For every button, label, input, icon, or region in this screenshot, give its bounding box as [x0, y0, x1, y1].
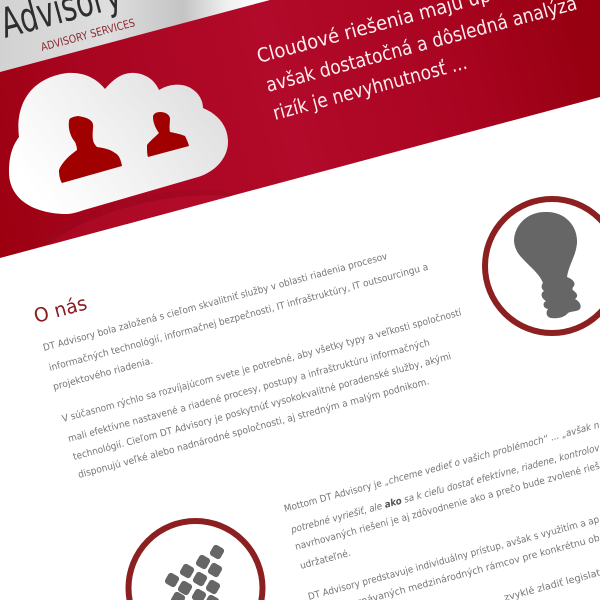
text block: about 2: V súčasnom rýchlo sa rozvíjajúcom svete je potrebné, aby všetky typy a veľkosti spoločností [61, 306, 463, 425]
icon: grid of squares in circle [128, 521, 262, 600]
text block: about 2 [61, 306, 463, 481]
heading: O nás: O nás [31, 292, 89, 328]
logo band [0, 0, 272, 72]
logo tagline: ADVISORY SERVICES [39, 16, 136, 54]
text block: motto: udržateľné. [299, 547, 352, 572]
text block: motto [283, 419, 600, 572]
text block: about 2: disponujú veľké alebo nadnárodné spoločnosti, aj stredným a malým podnikom. [77, 375, 430, 481]
text block: about 1: projektového riadenia. [52, 355, 154, 393]
banner heading: rizík je nevyhnutnosť ... [270, 51, 469, 125]
icon: cloud with two people [9, 73, 228, 214]
text block: about 2: mali efektívne nastavené a riadené procesy, postupy a infraštruktúru informačných [67, 337, 431, 445]
text block: about 1: informačných technológií, informačnej bezpečnosti, IT infraštruktúry, IT outsourcingu a [48, 261, 429, 374]
text block: about 1: DT Advisory bola založená s cieľom skvalitniť služby v oblasti riadenia procesov [42, 250, 389, 354]
red banner [0, 0, 600, 260]
icon: light bulb in circle [485, 199, 600, 333]
text block: about 2: technológií. Cieľom DT Advisory je poskytnúť vysokokvalitné poradenské služby, akými [72, 350, 452, 463]
person: small [147, 112, 189, 157]
person: large [59, 116, 122, 183]
